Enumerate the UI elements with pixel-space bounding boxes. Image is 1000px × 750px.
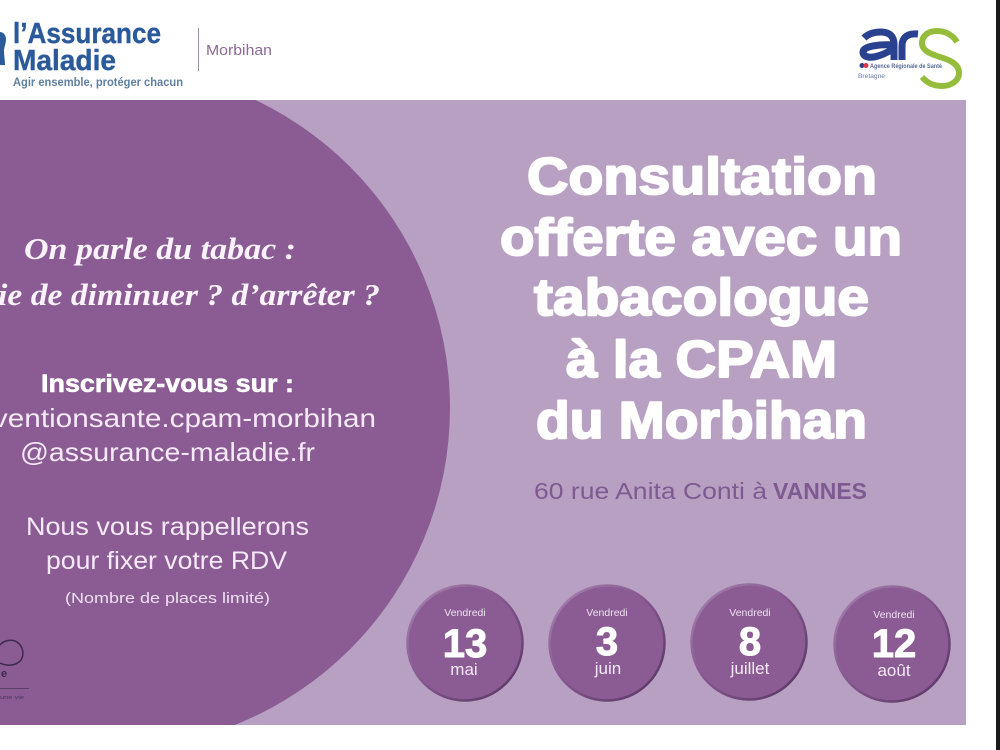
logo: ARS: Bretagne <box>858 74 886 80</box>
brand name <box>13 18 161 77</box>
date badge: 12 août <box>834 586 950 702</box>
partner logo cropped: e <box>1 668 7 680</box>
letter S <box>922 31 959 86</box>
date badge: 8 juillet: 8 <box>739 620 761 664</box>
agency text: Agence Régionale de Santé <box>870 64 943 70</box>
date badge: 8 juillet: juillet <box>730 659 770 678</box>
right edge strip <box>996 0 1000 750</box>
date badge: 8 juillet <box>692 584 806 700</box>
main title: offerte avec un <box>500 209 902 267</box>
date badge: 3 juin: juin <box>594 659 621 678</box>
date badge: 3 juin: Vendredi <box>586 607 628 619</box>
partner logo cropped: une vie <box>0 695 24 701</box>
date badge: 12 août: Vendredi <box>873 609 915 621</box>
logo: ARS <box>858 31 959 86</box>
main title: Consultation <box>527 148 877 206</box>
logo: Assurance Maladie <box>0 18 183 89</box>
script heading: On parle du tabac : <box>24 231 296 266</box>
date badge: 8 juillet: Vendredi <box>729 607 771 619</box>
address <box>534 478 867 504</box>
limited places note: (Nombre de places limité) <box>65 590 270 607</box>
main title: du Morbihan <box>536 392 867 450</box>
callback note: Nous vous rappellerons <box>26 513 309 541</box>
brand name: l’Assurance <box>13 18 161 50</box>
date badge: 13 mai: mai <box>450 660 478 679</box>
address: VANNES <box>773 478 867 504</box>
main title <box>500 148 902 450</box>
icon: figure cropped <box>0 32 6 65</box>
email address <box>0 403 376 467</box>
department label <box>198 28 272 71</box>
department label: Morbihan <box>206 42 272 59</box>
main title: tabacologue <box>534 269 869 327</box>
sign-up heading: Inscrivez-vous sur : <box>41 370 294 398</box>
date badge: 13 mai: 13 <box>443 622 487 666</box>
date badge: 3 juin <box>550 586 664 700</box>
letters a r <box>863 32 918 60</box>
date badge: 13 mai: Vendredi <box>444 607 486 619</box>
callback note: pour fixer votre RDV <box>46 547 287 575</box>
brand name: Maladie <box>13 45 116 77</box>
main title: à la CPAM <box>566 331 837 389</box>
email address: @assurance-maladie.fr <box>20 437 315 467</box>
date badge: 3 juin: 3 <box>596 620 618 664</box>
date badge: 13 mai <box>408 586 522 700</box>
tagline: Agir ensemble, protéger chacun <box>13 77 183 89</box>
date badge: 12 août: 12 <box>872 622 916 666</box>
partner logo cropped <box>0 640 29 701</box>
address: 60 rue Anita Conti à <box>534 478 767 504</box>
callback note <box>26 513 309 575</box>
date badge: 12 août: août <box>877 661 911 680</box>
flag <box>860 63 864 68</box>
script heading <box>0 231 380 312</box>
panel: purple circle with sign-up information <box>0 67 450 749</box>
